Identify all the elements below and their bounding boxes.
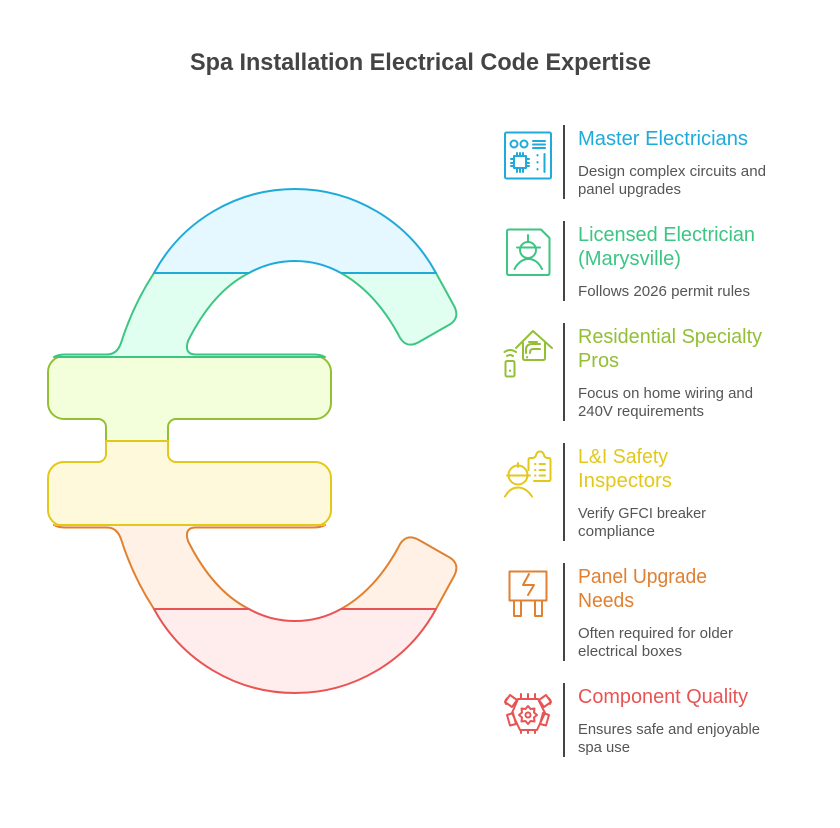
segment: green upper arc <box>54 273 456 357</box>
heading: Panel Upgrade <box>578 566 707 588</box>
title: Spa Installation Electrical Code Expertise <box>190 49 651 76</box>
icon: inspector with clipboard <box>505 452 550 496</box>
item: Panel Upgrade Needs <box>510 563 733 661</box>
heading: Needs <box>578 590 634 612</box>
item: Residential Specialty Pros <box>504 323 762 421</box>
divider bar <box>563 221 565 301</box>
heading <box>578 326 762 372</box>
description: Often required for older <box>578 625 733 642</box>
segment: yellow lower bar <box>48 441 331 526</box>
item: Licensed Electrician <box>507 221 755 301</box>
heading: Pros <box>578 350 619 372</box>
description: Follows 2026 permit rules <box>578 283 750 300</box>
description: Ensures safe and enjoyable <box>578 721 760 738</box>
divider bar <box>563 125 565 199</box>
description: Focus on home wiring and <box>578 385 753 402</box>
icon: gear component <box>505 694 551 733</box>
description: 240V requirements <box>578 403 704 420</box>
icon: electrical panel with bolt <box>510 572 546 616</box>
heading: Residential Specialty <box>578 326 762 348</box>
divider bar <box>563 323 565 421</box>
icon: smart home with faucet <box>504 331 552 376</box>
segment: yellow bottom edge <box>54 524 325 526</box>
heading <box>578 446 672 492</box>
heading: Licensed Electrician <box>578 224 755 246</box>
heading: L&I Safety <box>578 446 668 468</box>
divider bar <box>563 443 565 541</box>
segment: orange lower arc <box>54 525 456 609</box>
description: electrical boxes <box>578 643 682 660</box>
segment: red bottom arc <box>154 609 436 693</box>
heading <box>578 566 707 612</box>
description <box>578 385 753 420</box>
description: panel upgrades <box>578 181 681 198</box>
description <box>578 721 760 756</box>
item: Component Quality <box>505 683 760 757</box>
heading: Component Quality <box>578 686 748 708</box>
description: Verify GFCI breaker <box>578 505 706 522</box>
heading: Master Electricians <box>578 128 748 150</box>
description <box>578 505 706 540</box>
description: compliance <box>578 523 655 540</box>
description: Design complex circuits and <box>578 163 766 180</box>
euro symbol diagram <box>48 189 456 693</box>
segment: lime upper bar <box>48 356 331 441</box>
icon: licensed electrician badge <box>507 230 550 275</box>
heading: Inspectors <box>578 470 672 492</box>
divider bar <box>563 683 565 757</box>
segment: blue top arc <box>154 189 436 273</box>
heading: (Marysville) <box>578 248 681 270</box>
description: spa use <box>578 739 630 756</box>
divider bar <box>563 563 565 661</box>
heading <box>578 224 755 270</box>
description <box>578 163 766 198</box>
item: L&I Safety Inspectors <box>505 443 706 541</box>
item: Master Electricians <box>505 125 766 199</box>
icon: circuit board <box>505 132 551 178</box>
description <box>578 625 733 660</box>
